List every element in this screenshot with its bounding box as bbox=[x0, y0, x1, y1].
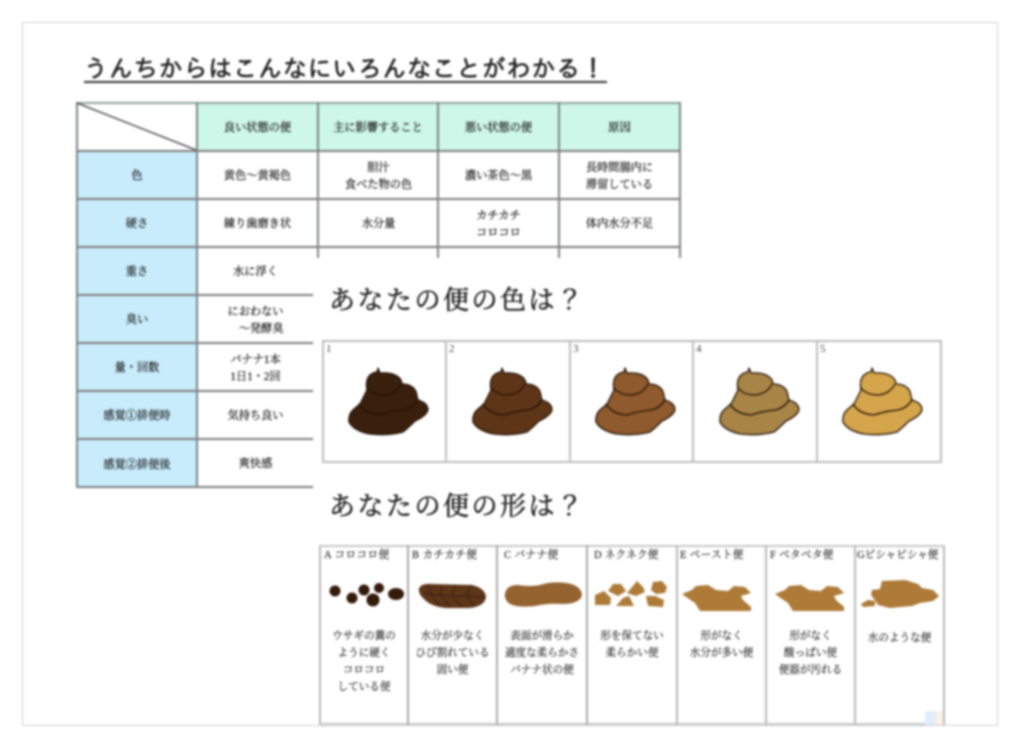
D description: 柔らかい便 bbox=[606, 648, 658, 659]
A description bbox=[332, 628, 396, 693]
good colour: 黄色～黄褐色 bbox=[224, 170, 291, 182]
C description: バナナ状の便 bbox=[510, 665, 574, 676]
shape G watery bbox=[871, 580, 939, 608]
E description: 形がなく bbox=[700, 631, 743, 642]
bad colour: 濃い茶色～黒 bbox=[465, 170, 532, 182]
B description: 水分が少なく bbox=[421, 631, 484, 642]
value: smell: ～発酵臭 bbox=[239, 322, 283, 334]
column D bbox=[593, 548, 664, 659]
label: feeling during bbox=[77, 391, 197, 439]
label: smell bbox=[77, 295, 197, 343]
bad hardness: カチカチ bbox=[476, 210, 521, 222]
label: colour bbox=[77, 151, 197, 199]
colour chart grid bbox=[322, 340, 942, 463]
F description bbox=[778, 628, 842, 676]
E name: E ペースト便 bbox=[680, 550, 744, 561]
header: bad stool bbox=[438, 103, 559, 151]
hardness cause: 体内水分不足 bbox=[586, 218, 653, 230]
colour influence: 胆汁 bbox=[367, 162, 390, 174]
label: hardness bbox=[77, 199, 197, 247]
shape F mushy bbox=[775, 585, 844, 611]
heading: shape question: あなたの便の形は？ bbox=[329, 492, 586, 521]
stool colour 3 bbox=[596, 368, 675, 435]
G description: 水のような便 bbox=[868, 633, 931, 644]
row: hardness bbox=[222, 208, 654, 238]
E description bbox=[689, 628, 754, 659]
F description: 酸っぱい便 bbox=[784, 648, 837, 659]
label: colour: 色 bbox=[131, 170, 143, 182]
column G bbox=[856, 548, 940, 644]
title: うんちからはこんなにいろんなことがわかる！ bbox=[84, 56, 606, 83]
label: hardness: 硬さ bbox=[126, 218, 148, 230]
hardness influence: 水分量 bbox=[362, 218, 395, 230]
number 1: 1 bbox=[326, 343, 332, 355]
number 2: 2 bbox=[449, 343, 454, 355]
B name: B カチカチ便 bbox=[412, 550, 477, 561]
colour cause: 長時間腸内に bbox=[586, 162, 653, 174]
label: amount and frequency: 量・回数 bbox=[115, 362, 159, 374]
value: amount: 1日1・2回 bbox=[230, 370, 281, 382]
D description bbox=[600, 628, 664, 659]
shape E paste bbox=[682, 585, 751, 611]
bad hardness bbox=[476, 208, 521, 238]
C name: C バナナ便 bbox=[504, 550, 558, 561]
header: main influence bbox=[318, 103, 438, 151]
label: feeling after: 感覚②排便後 bbox=[103, 458, 171, 470]
column E bbox=[679, 548, 754, 659]
table: stool condition reference bbox=[74, 100, 682, 490]
header: bad stool: 悪い状態の便 bbox=[465, 122, 532, 134]
label: feeling during: 感覚①排便時 bbox=[103, 410, 171, 422]
stool colour 2 bbox=[473, 368, 552, 435]
colour influence: 食べた物の色 bbox=[345, 178, 412, 190]
table grid lines bbox=[76, 102, 681, 104]
stool colour 4 bbox=[720, 368, 799, 435]
header: main influence: 主に影響すること bbox=[333, 122, 423, 134]
label: weight bbox=[77, 247, 197, 295]
value: amount: バナナ1本 bbox=[230, 354, 281, 366]
F name: F ベタベタ便 bbox=[770, 550, 834, 561]
header: good stool bbox=[197, 103, 318, 151]
A description: ように硬く bbox=[338, 648, 390, 659]
row labels bbox=[77, 151, 197, 487]
header: cause bbox=[559, 103, 680, 151]
number 4: 4 bbox=[696, 343, 702, 355]
B description bbox=[415, 628, 490, 676]
row: colour bbox=[223, 160, 654, 191]
good hardness: 練り歯磨き状 bbox=[224, 218, 291, 230]
shape chart grid bbox=[319, 545, 945, 725]
shape D soft pieces bbox=[595, 581, 667, 607]
column B bbox=[411, 548, 490, 676]
stool colour 5 bbox=[843, 368, 922, 435]
column A bbox=[323, 548, 396, 693]
A description: コロコロ bbox=[343, 665, 385, 676]
panel: stool shape chart bbox=[318, 544, 946, 726]
label: weight: 重さ bbox=[126, 266, 148, 278]
C description: 適度な柔らかさ bbox=[505, 648, 579, 659]
label: smell: 臭い bbox=[126, 314, 148, 326]
shape A pellets bbox=[330, 583, 404, 606]
stool colour 1 bbox=[349, 368, 428, 435]
corner mark bbox=[925, 711, 943, 725]
value: amount bbox=[230, 352, 282, 382]
A description: している便 bbox=[338, 682, 390, 693]
G name: Gビシャビシャ便 bbox=[857, 550, 938, 561]
shape G small puddle bbox=[861, 600, 875, 607]
A name: A コロコロ便 bbox=[324, 550, 389, 561]
F description: 便器が汚れる bbox=[779, 665, 842, 676]
colour cause: 滞留している bbox=[586, 178, 653, 190]
colour influence bbox=[344, 160, 413, 191]
bad hardness: コロコロ bbox=[476, 226, 521, 238]
label: feeling after bbox=[77, 439, 197, 488]
column F bbox=[769, 548, 842, 676]
header: good stool: 良い状態の便 bbox=[224, 122, 291, 134]
column headers bbox=[197, 103, 680, 151]
value: smell: におわない bbox=[228, 306, 283, 318]
F description: 形がなく bbox=[789, 631, 832, 642]
heading: colour question: あなたの便の色は？ bbox=[329, 286, 586, 315]
E description: 水分が多い便 bbox=[690, 648, 753, 659]
column C bbox=[502, 548, 579, 676]
label: amount and frequency bbox=[77, 343, 197, 391]
B description: 固い便 bbox=[437, 665, 468, 676]
header: cause: 原因 bbox=[608, 122, 631, 134]
C description: 表面が滑らか bbox=[510, 631, 574, 642]
B description: ひび割れている bbox=[415, 648, 490, 659]
value: smell bbox=[227, 304, 284, 335]
C description bbox=[504, 628, 579, 676]
diagonal corner cell bbox=[76, 102, 198, 152]
number 5: 5 bbox=[820, 343, 826, 355]
D description: 形を保てない bbox=[600, 631, 664, 642]
panel: stool colour chart bbox=[321, 339, 943, 464]
number 3: 3 bbox=[573, 343, 578, 355]
value: feeling during: 気持ち良い bbox=[228, 410, 283, 422]
value: feeling after: 爽快感 bbox=[239, 458, 272, 470]
D name: D ネクネク便 bbox=[594, 550, 659, 561]
shape C banana bbox=[505, 582, 582, 607]
A description: ウサギの糞の bbox=[332, 631, 396, 642]
colour cause bbox=[585, 160, 654, 191]
value: weight: 水に浮く bbox=[233, 266, 278, 278]
shape B cracked lump bbox=[419, 584, 486, 608]
